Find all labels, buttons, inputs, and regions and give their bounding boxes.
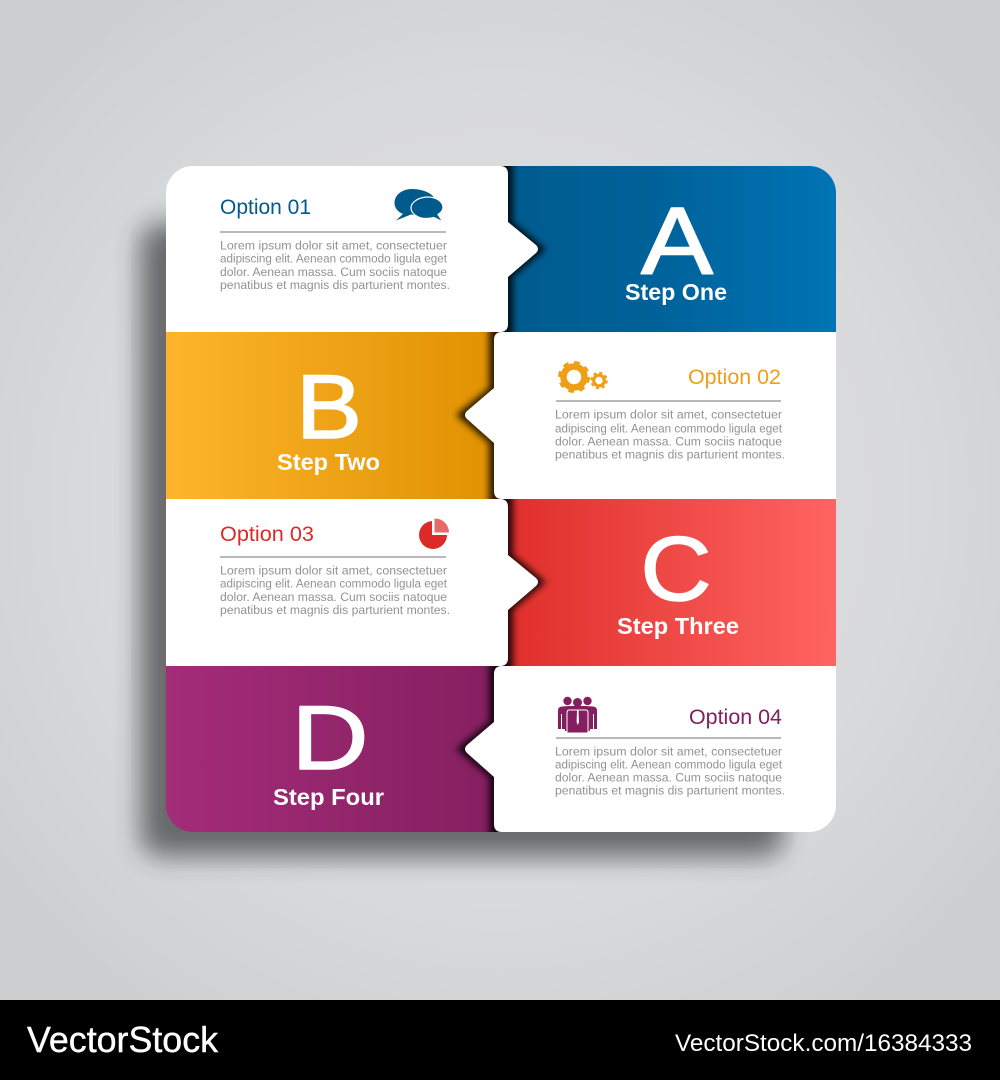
white panel row 4 xyxy=(465,666,836,832)
option 04 body text: Lorem ipsum dolor sit amet, consectetuer xyxy=(555,744,782,758)
band A background xyxy=(480,166,836,332)
option 02 body text: Lorem ipsum dolor sit amet, consectetuer xyxy=(555,408,782,422)
step D label xyxy=(273,688,384,810)
band B background xyxy=(166,332,506,499)
icon: team of people xyxy=(558,697,597,733)
footer logo: VectorStock xyxy=(27,1019,219,1060)
infographic card xyxy=(166,166,836,832)
divider xyxy=(556,400,781,402)
step D label: Step Four xyxy=(273,784,384,810)
option 03 body text: adipiscing elit. Aenean commodo ligula eget xyxy=(220,576,448,590)
option 01 body text xyxy=(220,238,450,292)
tab shadows xyxy=(452,166,549,832)
option 03 block xyxy=(220,518,450,617)
footer url: VectorStock.com/16384333 xyxy=(675,1030,972,1057)
option 03 body text xyxy=(220,564,450,617)
option 04 body text xyxy=(555,744,785,798)
step A label xyxy=(625,188,727,305)
divider xyxy=(220,556,446,558)
white panel row 1 xyxy=(166,166,538,332)
option 01 body text: penatibus et magnis dis parturient montes. xyxy=(220,278,450,292)
option 01 body text: Lorem ipsum dolor sit amet, consectetuer xyxy=(220,238,447,252)
icon: gears xyxy=(560,363,606,391)
option 02 heading: Option 02 xyxy=(688,366,781,389)
option 02 body text: penatibus et magnis dis parturient montes. xyxy=(555,448,785,462)
option 04 body text: adipiscing elit. Aenean commodo ligula eget xyxy=(555,758,783,772)
step D label: D xyxy=(292,688,368,789)
option 03 body text: Lorem ipsum dolor sit amet, consectetuer xyxy=(220,564,447,578)
white panel row 2 xyxy=(465,332,836,499)
icon: pie chart xyxy=(419,518,449,549)
option 01 body text: dolor. Aenean massa. Cum sociis natoque xyxy=(220,265,447,279)
white panel row 3 xyxy=(166,499,538,666)
option 04 body text: penatibus et magnis dis parturient montes. xyxy=(555,784,785,798)
band C background xyxy=(480,499,836,666)
step B label: B xyxy=(296,357,362,458)
option 02 block xyxy=(555,363,785,462)
step B label xyxy=(277,357,380,475)
band D background xyxy=(166,666,506,832)
option 04 heading: Option 04 xyxy=(689,706,782,729)
option 04 body text: dolor. Aenean massa. Cum sociis natoque xyxy=(555,770,782,784)
option 01 heading: Option 01 xyxy=(220,196,311,219)
icon: speech bubbles xyxy=(394,189,443,222)
option 02 body text xyxy=(555,408,785,462)
option 04 block xyxy=(555,697,785,798)
step C label: C xyxy=(640,519,712,620)
step A label: Step One xyxy=(625,279,727,305)
option 01 block xyxy=(220,189,450,292)
divider xyxy=(220,231,446,233)
step C label: Step Three xyxy=(617,613,739,639)
footer bar xyxy=(0,1000,1000,1080)
option 03 heading: Option 03 xyxy=(220,523,314,546)
divider xyxy=(556,737,781,739)
option 02 body text: dolor. Aenean massa. Cum sociis natoque xyxy=(555,434,782,448)
option 03 body text: dolor. Aenean massa. Cum sociis natoque xyxy=(220,590,447,604)
option 03 body text: penatibus et magnis dis parturient montes. xyxy=(220,603,450,617)
step B label: Step Two xyxy=(277,449,380,475)
card drop shadow xyxy=(131,206,793,868)
step C label xyxy=(617,519,739,639)
step A label: A xyxy=(641,188,713,295)
option 02 body text: adipiscing elit. Aenean commodo ligula eget xyxy=(555,422,783,436)
option 01 body text: adipiscing elit. Aenean commodo ligula eget xyxy=(220,252,448,266)
